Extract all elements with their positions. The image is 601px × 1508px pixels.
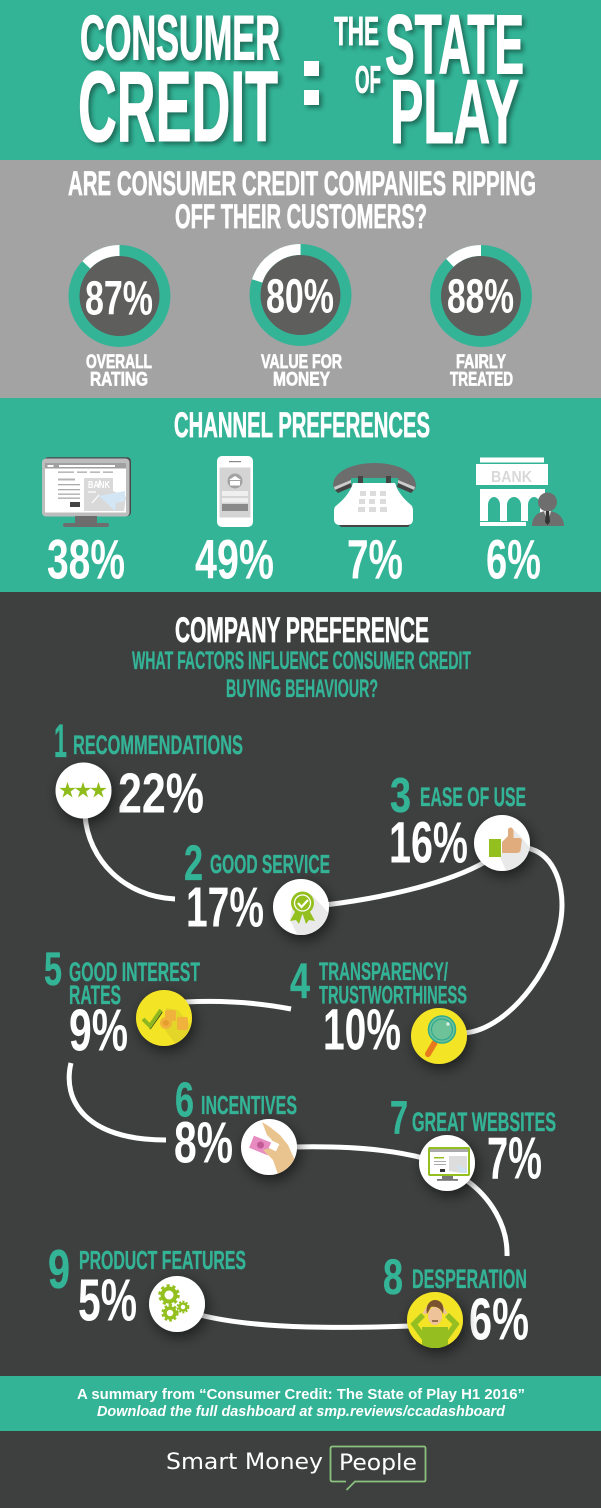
icon: telephone — [333, 463, 416, 527]
gauge: value for money 80%: VALUE FOR — [261, 352, 342, 373]
title: THE — [334, 8, 379, 54]
company heading: COMPANY PREFERENCE — [175, 611, 429, 650]
gauge: overall rating 87% — [55, 232, 184, 390]
icon: magnifying glass — [428, 1016, 456, 1054]
icon: bank with person — [476, 458, 564, 526]
gauge: value for money 80%: 80% — [266, 270, 334, 324]
factor 3: ease of use: 16% — [389, 810, 468, 876]
factor 4: transparency: 4 — [290, 953, 310, 1009]
factor 8: desperation: 6% — [469, 1286, 529, 1352]
icon: stressed person — [414, 1300, 456, 1352]
factor 2: good service — [184, 835, 335, 940]
gauge: fairly treated 88%: TREATED — [450, 370, 513, 390]
factor 1: recommendations — [54, 714, 243, 826]
summary band: A summary from “Consumer Credit: The State of Play H1 2016” — [77, 1387, 525, 1403]
factor 9: product features — [48, 1238, 246, 1334]
company subheading: BUYING BEHAVIOUR? — [226, 675, 378, 703]
factor 6: incentives: INCENTIVES — [201, 1090, 297, 1120]
factor 6: incentives: 6 — [175, 1074, 194, 1128]
factor 4: transparency: 10% — [323, 998, 401, 1062]
company subheading — [132, 647, 471, 703]
factor 4: transparency: TRANSPARENCY/ — [319, 958, 448, 986]
footer logo: People — [339, 1451, 417, 1476]
factor 1: recommendations: RECOMMENDATIONS — [73, 730, 243, 760]
gauge: overall rating 87%: RATING — [90, 370, 148, 390]
factor 2: good service: 2 — [184, 835, 203, 891]
factor 9: product features: PRODUCT FEATURES — [79, 1245, 246, 1275]
gauge: overall rating 87%: OVERALL — [86, 352, 152, 373]
icon: monitor — [42, 457, 131, 527]
factor 3: ease of use: 3 — [390, 769, 411, 823]
icon: rosette — [290, 892, 315, 924]
factor 8: desperation: 8 — [383, 1249, 403, 1305]
gauge: value for money 80% — [243, 238, 358, 390]
factor 8: desperation: DESPERATION — [412, 1264, 527, 1294]
factor 5: good interest rates: RATES — [69, 980, 121, 1010]
icon: monitor: BANK — [88, 480, 111, 491]
channel percentages: 7% — [347, 528, 403, 590]
factor 7: great websites: 7 — [390, 1091, 408, 1144]
connecting path between factors — [69, 815, 562, 1327]
gauge: overall rating 87%: 87% — [85, 272, 153, 326]
icon: check and coins — [143, 1010, 188, 1030]
icon: website on monitor — [429, 1148, 469, 1181]
icon: gears — [160, 1286, 188, 1320]
factor 8: desperation — [383, 1249, 529, 1352]
factor 9: product features: 5% — [78, 1268, 137, 1334]
factor 3: ease of use: EASE OF USE — [420, 782, 526, 812]
gauge: fairly treated 88% — [417, 232, 545, 390]
icon: hand holding money — [249, 1122, 294, 1174]
factor 5: good interest rates: GOOD INTEREST — [69, 957, 200, 987]
title: CONSUMER — [80, 4, 280, 74]
icon: smartphone — [217, 456, 253, 527]
footer logo: Smart Money — [166, 1450, 323, 1475]
factor 7: great websites — [390, 1091, 556, 1192]
panel: company preference — [44, 616, 564, 1357]
factor 3: ease of use — [389, 769, 540, 880]
header band — [0, 0, 601, 160]
factor 2: good service: 17% — [186, 876, 264, 940]
factor 6: incentives: 8% — [174, 1110, 233, 1176]
title: CREDIT — [78, 51, 278, 163]
factor 5: good interest rates — [44, 952, 200, 1055]
factor 6: incentives — [174, 1074, 297, 1180]
question heading — [68, 165, 536, 236]
channel percentages: 6% — [486, 528, 541, 590]
title — [78, 0, 524, 163]
panel: channel preferences — [0, 398, 601, 592]
factor 2: good service: GOOD SERVICE — [210, 849, 330, 879]
factor 5: good interest rates: 5 — [44, 942, 62, 995]
icon: bank with person: BANK — [491, 469, 532, 486]
channel percentages — [47, 528, 541, 590]
factor 1: recommendations: 1 — [54, 714, 67, 767]
icon: three stars — [59, 782, 107, 797]
panel: ripping off customers — [0, 160, 601, 398]
factor 1: recommendations: 22% — [118, 762, 204, 826]
summary band — [0, 1376, 601, 1431]
footer logo — [0, 1431, 601, 1508]
factor 4: transparency: TRUSTWORTHINESS — [319, 982, 467, 1010]
factor 9: product features: 9 — [48, 1238, 70, 1300]
factor 7: great websites: 7% — [487, 1126, 542, 1192]
gauge: fairly treated 88%: FAIRLY — [456, 352, 506, 373]
question heading: OFF THEIR CUSTOMERS? — [175, 198, 427, 236]
summary band: Download the full dashboard at smp.reviews/ccadashboard — [97, 1404, 506, 1420]
channel percentages: 49% — [195, 528, 274, 590]
gauge: fairly treated 88%: 88% — [447, 270, 514, 324]
gauge: value for money 80%: MONEY — [273, 370, 330, 390]
channel percentages: 38% — [47, 528, 125, 590]
icon: thumbs up — [489, 827, 522, 857]
factor 5: good interest rates: 9% — [69, 998, 128, 1064]
factor 4: transparency — [290, 953, 467, 1064]
title: OF — [355, 60, 381, 102]
